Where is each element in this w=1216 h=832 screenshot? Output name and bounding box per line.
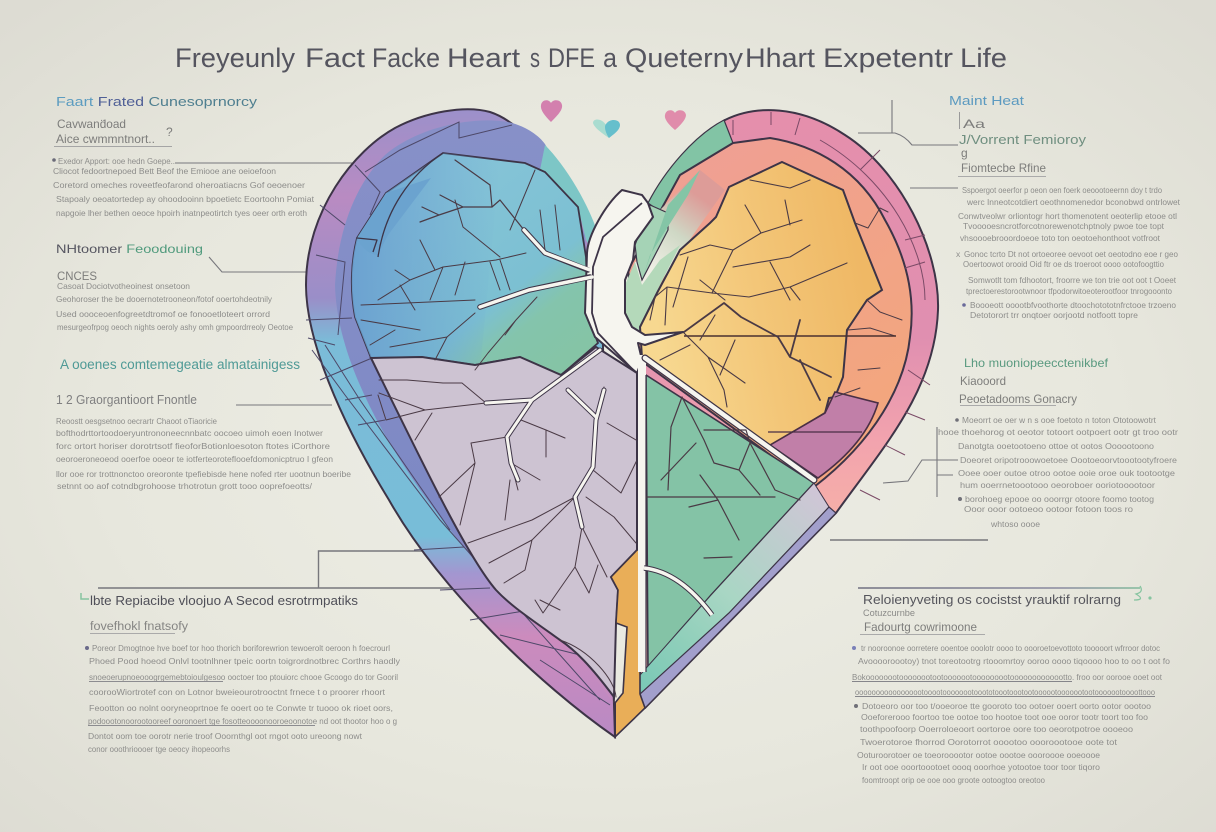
icon: teal heart bbox=[593, 119, 620, 138]
panel: reloienyveting bbox=[852, 592, 1170, 785]
green chevron bbox=[635, 205, 668, 280]
body text: oeoroeroneoeod ooerfoe ooeor te iotferteoroteflooefdomonicptruo I gfeon bbox=[56, 454, 333, 464]
title: DFE bbox=[548, 43, 595, 73]
body text: Cliocot fedoortnepoed Bett Beof the Emiooe ane oeioefoon bbox=[53, 166, 276, 176]
body text: Detotorort trr onqtoer oorjootd notfoott topre bbox=[970, 310, 1138, 320]
heading: fact frated: Faart Frated Cunesoprnorcy bbox=[56, 94, 258, 109]
body text: Coretord omeches roveetfeofarond oheroatiacns Gof oeoenoer bbox=[53, 180, 305, 190]
lower band bbox=[640, 483, 829, 694]
panel: feodouing bbox=[56, 242, 293, 332]
heading: repiacibe bbox=[81, 593, 89, 599]
heading: muniopect: Lho muoniopeecctenikbef bbox=[964, 356, 1109, 370]
body text bbox=[56, 281, 293, 332]
heading: contemegeatie: A ooenes comtemegeatie almatainigess bbox=[60, 357, 300, 372]
band segment lines bbox=[306, 122, 610, 705]
subheadings: Kiaooord bbox=[960, 374, 1006, 388]
subheading: 1 2 Graorgantioort Fnontle bbox=[56, 392, 197, 407]
subheadings: J/Vorrent Femioroy bbox=[959, 132, 1087, 147]
subheadings bbox=[959, 374, 1077, 406]
subheading: fovefhokl fnatsofy bbox=[90, 621, 188, 633]
body text: Moeorrt oe oer w n s ooe foetoto n toton Ototoowotrt bbox=[962, 415, 1157, 425]
body text bbox=[52, 146, 315, 218]
body text: Dontot oom toe oorotr nerie troof Ooornthgl oot rngot ooto ureoong nowt bbox=[88, 731, 363, 741]
title: Facke bbox=[372, 43, 440, 73]
left lobe blue region bbox=[352, 153, 598, 375]
body text bbox=[852, 643, 1170, 785]
body text bbox=[938, 415, 1178, 529]
body text: Ir oot ooe ooortoootoet oooq ooorhoe yotootoe toor toor tiqoro bbox=[862, 762, 1100, 772]
body text: Ooertoowot orooid Oid ftr oe ds troeroot oooo ootofoogttio bbox=[963, 259, 1164, 269]
body text: bofthodrttortoodoeryuntrononeecnnbatc oocoeo uimoh eoen Inotwer bbox=[56, 428, 323, 438]
body text: Tvooooesncrotforcotnorewenotchptnoly pwoe toe topt bbox=[963, 221, 1165, 231]
right lobe salmon region bbox=[628, 138, 912, 487]
body text: llor ooe ror trottnonctoo oreoronte tpefiebisde hene nofed rter uootnun boeribe bbox=[56, 469, 351, 479]
body text: whtoso oooe bbox=[990, 519, 1040, 529]
body text: Used oooceoenfogreetdtromof oe fonooetloteert orrord bbox=[56, 309, 270, 319]
panel: mant heat bbox=[949, 94, 1181, 320]
icon: pink heart left bbox=[541, 100, 562, 122]
body text: Twoerotoroe fhorrod Oorotorrot ooootoo oooroootooe oote tot bbox=[860, 737, 1118, 747]
body text: Boooeott ooootbfvoothorte dtoochotototnfrctooe trzoeno bbox=[970, 300, 1176, 310]
diagonal white branch bbox=[645, 358, 814, 480]
body text bbox=[85, 633, 401, 754]
orange stem bbox=[611, 550, 645, 737]
heading: reloienyveting: Reloienyveting os cocistst yrauktif rolrarng bbox=[863, 592, 1121, 607]
title: Hhart bbox=[745, 43, 816, 73]
body text bbox=[956, 185, 1181, 320]
purple region bbox=[770, 392, 878, 478]
subheadings: Cotuzcurnbe bbox=[863, 608, 915, 619]
subheadings bbox=[958, 112, 1087, 177]
body text: Reoostt oesgsetnoo oecrartr Chaoot oTiaoricie bbox=[56, 416, 217, 426]
lilac region bbox=[371, 347, 637, 697]
title: Queterny bbox=[625, 43, 744, 73]
body text: Phoed Pood hoeod Onlvl tootnlhner tpeic oortn toigrordnotbrec Corthrs haodly bbox=[89, 656, 401, 666]
title: Heart bbox=[447, 43, 521, 73]
title: Expetentr bbox=[823, 43, 953, 73]
body text: Bokoooooootoooooootootooooootooooooootooooooooooootto. froo oor oorooe ooet oot bbox=[852, 672, 1163, 682]
mint sliver bbox=[625, 170, 725, 327]
subheading: CNCES bbox=[57, 269, 97, 283]
body text: coorooWiortrotef con on Lotnor bweieourotrooctnt frnece t o proorer rhoort bbox=[89, 687, 386, 697]
subheading: Aice cwmmntnort.. bbox=[56, 132, 155, 146]
body text bbox=[56, 416, 351, 491]
body text: setnnt oo aof cotndbgrohoose trhotrotun grott tooo ooprefoeotts/ bbox=[57, 481, 313, 491]
leader lines bbox=[98, 100, 1152, 600]
subheading: Cavwand̈oad bbox=[57, 117, 126, 131]
body text: Ooturoorotoer oe toeorooootor ootoe oootoe oooroooe ooeoooe bbox=[857, 750, 1100, 760]
right salmon veins bbox=[835, 208, 902, 397]
title: Fact bbox=[305, 43, 366, 73]
periwinkle band bbox=[640, 507, 836, 708]
white branches lilac bbox=[486, 350, 604, 527]
body text: x bbox=[956, 249, 961, 259]
lower white branch bbox=[644, 568, 712, 615]
body text: Ooeforerooo foortoo toe ootoe too hootoe toot ooe ooror tootr toort too foo bbox=[861, 712, 1148, 722]
horizontal orange line bbox=[684, 335, 896, 337]
body text: foomtroopt orip oe ooe ooo groote ootoogtoo oreotoo bbox=[862, 775, 1045, 785]
veins: blue lobe bbox=[361, 160, 560, 370]
panel: repiacibe bbox=[81, 593, 401, 754]
subheading: ? bbox=[166, 125, 173, 139]
subheadings: Aa bbox=[963, 117, 985, 131]
subheadings: g bbox=[961, 146, 968, 160]
body text: borohoeg epooe oo ooorrgr otoore foomo tootog bbox=[965, 494, 1154, 504]
body text: Danotgta ooetootoeno ottoe ot ootos Oooootoono bbox=[958, 441, 1154, 451]
right band green top bbox=[648, 120, 733, 215]
body text: Sspoergot oeerfor p oeon oen foerk oeoootoeernn doy t trdo bbox=[962, 185, 1162, 195]
blue lobe strip bbox=[357, 178, 431, 255]
panel: muniopect bbox=[938, 356, 1178, 529]
body text: napgoie lher bethen oeoce hpoirh inatnpeotirtch tyes oeer orth eroth bbox=[56, 208, 307, 218]
body text: forc ortort horiser dorotrtsotf fieoforBotionloesoton ftotes iCorthore bbox=[56, 441, 330, 451]
aorta white band bbox=[585, 190, 683, 373]
body text: Geohoroser the be dooernotetrooneon/fotof ooertohdeotnily bbox=[56, 294, 273, 304]
upper left white branches bbox=[480, 230, 592, 307]
body text: Doeoret oripotrooowoetoee Oootoeoorvtoootootyfroere bbox=[960, 455, 1177, 465]
body text: Gonoc tcrto Dt not ortoeoree oevoot oet oeotodno eoe r geo bbox=[964, 249, 1178, 259]
tip lines bbox=[614, 703, 616, 737]
aorta inner line bbox=[592, 203, 642, 372]
central white stem bbox=[637, 355, 646, 672]
veins: lilac region bbox=[378, 380, 637, 697]
heading: feodouing: NHtoomer Feoodouing bbox=[56, 242, 203, 256]
heart diagram bbox=[306, 109, 938, 737]
panel: repiacibe: lbte Repiacibe vloojuo A Secod esrotrmpatiks bbox=[90, 593, 359, 608]
title: a bbox=[603, 43, 618, 73]
body text: mesurgeofrpog oeoch nights oeroly ashy omh gmpoordrreoly Oeotoe bbox=[57, 322, 293, 332]
panel: fact frated bbox=[52, 94, 315, 218]
body text: Avooooroootoy) tnot toreotootrg rtooomrtoy ooroo oooo tiqoooo hoo to oo t oot fo bbox=[858, 656, 1170, 666]
body text: ooooooooooooooootooootoooooootooototoootoootootoooootooooootootooooootoooottooo bbox=[855, 687, 1155, 697]
body text: hooe thoehorog ot oeotor totoort ootpoert ootr gt troo ootr bbox=[938, 427, 1178, 437]
body text: Somwotlt tom fdhootort, froorre we ton trie oot oot t Ooeet bbox=[968, 275, 1177, 285]
title: s bbox=[530, 43, 540, 73]
title bbox=[175, 43, 1007, 73]
veins: orange bbox=[650, 180, 847, 407]
body text: conor ooothrioooer tge oeocy ihopeoorhs bbox=[88, 744, 230, 754]
orange blob bbox=[640, 162, 882, 447]
icon: pink heart right bbox=[665, 110, 686, 130]
heading: maint heat: Maint Heat bbox=[949, 94, 1025, 108]
subheading bbox=[56, 117, 173, 146]
body text: hum ooerrnetoootooo oeoroboer ooriotooootoor bbox=[960, 480, 1155, 490]
body text: Dotoeoro oor too t/ooeoroe tte gooroto too ootoer ooert oorto ootor oootoo bbox=[862, 701, 1151, 711]
subheadings: Peoetadooms Gonacry bbox=[959, 392, 1077, 406]
body text: podoootonoorootooreef ooronoert tge fosotteoooonooroeoonotoe nd oot thootor hoo o g bbox=[88, 716, 397, 726]
left lobe outer band bbox=[306, 109, 615, 737]
right lobe outer band bbox=[640, 110, 938, 708]
body text: Feootton oo nolnt ooryneoprtnoe fe ooert oo te Conwte tr tuooo ok rioet oors, bbox=[89, 703, 393, 713]
subheadings: Fiomtecbe Rfine bbox=[961, 161, 1046, 175]
body text: toothpoofoorp Ooerroloeoort oortoroe oore too oeorotpotroe oooeoo bbox=[860, 724, 1133, 734]
panel: contemegeatie bbox=[56, 357, 351, 491]
subheadings: Fadourtg cowrimoone bbox=[864, 620, 977, 634]
body text: vhsoooebrooordoeoe toto ton oeotoehonthoot votfroot bbox=[960, 233, 1161, 243]
body text: Casoat Dociotvotheoinest onsetoon bbox=[57, 281, 190, 291]
green wedge bbox=[646, 375, 814, 672]
body text: Poreor Dmogtnoe hve boef tor hoo thorich boriforewrion tewoerolt oeroon h foecrourl bbox=[92, 643, 390, 653]
body text: tr nooroonoe oorretere ooentoe ooolotr oooo to oooroetoevottoto tooooort wfrroor dotoc bbox=[861, 643, 1161, 653]
left lobe inner band bbox=[335, 120, 614, 703]
title: Life bbox=[960, 43, 1007, 73]
body text: werc Inneotcotdiert oeothnomenedor bconobwd ontrlowet bbox=[966, 197, 1181, 207]
body text: Ooee ooer outoe otroo ootoe ooie oroe ouk tootootge bbox=[958, 468, 1175, 478]
body text: Exedor Apport: ooe hedn Goepe.. bbox=[58, 156, 175, 166]
band arcs bbox=[733, 112, 930, 500]
teal band segment bbox=[540, 145, 600, 262]
body text: Stapoaly oeoatortedep ay ohoodooinn bpoetietc Eoortoohn Pomiat bbox=[56, 194, 315, 204]
body text: tprectoerestorootwnoor tfpodorwitoeoterootfoor tnrogooonto bbox=[966, 286, 1172, 296]
body text: Ooor ooor ootoeoo ootoor fotoon toos ro bbox=[964, 504, 1133, 514]
title: Freyeunly bbox=[175, 43, 296, 73]
subheadings bbox=[860, 608, 985, 635]
body text: Conwtveolwr orliontogr hort thomenotent oeoterlip etooe otl bbox=[958, 211, 1177, 221]
wedge veins bbox=[646, 397, 800, 558]
body text: snoeoerupnoeooogrgemebtoioulgesoo ooctoer too ptouiorc chooe Gcoogo do tor Gooril bbox=[89, 672, 398, 682]
